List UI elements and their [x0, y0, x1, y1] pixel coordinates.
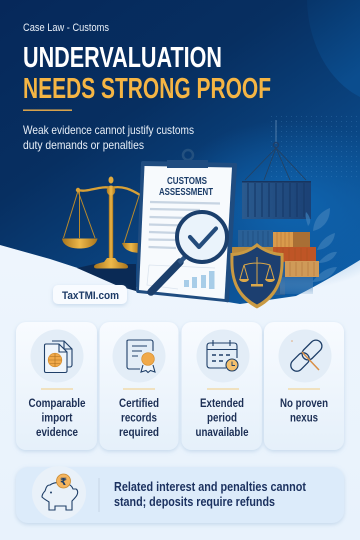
illustration: stacked containers	[232, 230, 319, 295]
magnifier	[151, 212, 227, 292]
panel text	[114, 480, 307, 509]
card label: unavailable	[196, 425, 249, 439]
subtitle	[23, 123, 194, 152]
icon: broken chain	[288, 338, 324, 374]
card: certified records required	[100, 322, 178, 450]
title: UNDERVALUATION	[23, 42, 222, 74]
card label	[119, 396, 159, 439]
card label: import	[42, 410, 72, 424]
illustration: shield with scales	[230, 243, 284, 308]
illustration: clipboard document	[136, 150, 237, 302]
title	[23, 42, 271, 105]
document heading: ASSESSMENT	[159, 187, 213, 198]
background: navy hero with curved lower edge	[0, 0, 360, 304]
illustration: leaves	[306, 208, 337, 282]
badge: TaxTMI.com: TaxTMI.com	[62, 290, 119, 302]
card label: No proven	[280, 396, 328, 410]
subtitle: duty demands or penalties	[23, 138, 144, 152]
card label	[28, 396, 86, 439]
icon: documents with globe	[44, 341, 72, 372]
icon: certificate with ribbon	[127, 340, 155, 372]
badge: TaxTMI.com	[53, 285, 127, 304]
icon: piggy bank with rupee coin: ₹	[60, 477, 67, 488]
card label: Comparable	[28, 396, 86, 410]
subtitle: Weak evidence cannot justify customs	[23, 123, 194, 137]
document heading: CUSTOMS	[167, 176, 207, 187]
document lines	[148, 202, 220, 248]
icon: calendar with clock	[207, 340, 238, 371]
panel: refunds note	[16, 466, 344, 523]
panel text: Related interest and penalties cannot	[114, 480, 307, 494]
title: NEEDS STRONG PROOF	[23, 73, 271, 105]
card label: Extended	[200, 396, 244, 410]
mini bar chart	[184, 271, 214, 289]
panel text: stand; deposits require refunds	[114, 495, 275, 509]
illustration: gold scales on pedestal	[62, 176, 140, 291]
clipboard clip	[167, 150, 208, 168]
card: comparable import evidence	[16, 322, 97, 450]
card label: nexus	[290, 410, 318, 424]
card label	[280, 396, 328, 424]
title rule	[23, 110, 72, 111]
card label: records	[121, 410, 157, 424]
card label: Certified	[119, 396, 159, 410]
card: no proven nexus	[264, 322, 344, 450]
eyebrow: Case Law - Customs: Case Law - Customs	[23, 22, 109, 34]
card label	[196, 396, 249, 439]
card: extended period unavailable	[182, 322, 262, 450]
card label: period	[207, 410, 237, 424]
icon: piggy bank with rupee coin	[42, 474, 78, 510]
card label: required	[119, 425, 159, 439]
document heading	[159, 176, 213, 198]
illustration: hanging container	[242, 120, 311, 219]
card label: evidence	[36, 425, 78, 439]
